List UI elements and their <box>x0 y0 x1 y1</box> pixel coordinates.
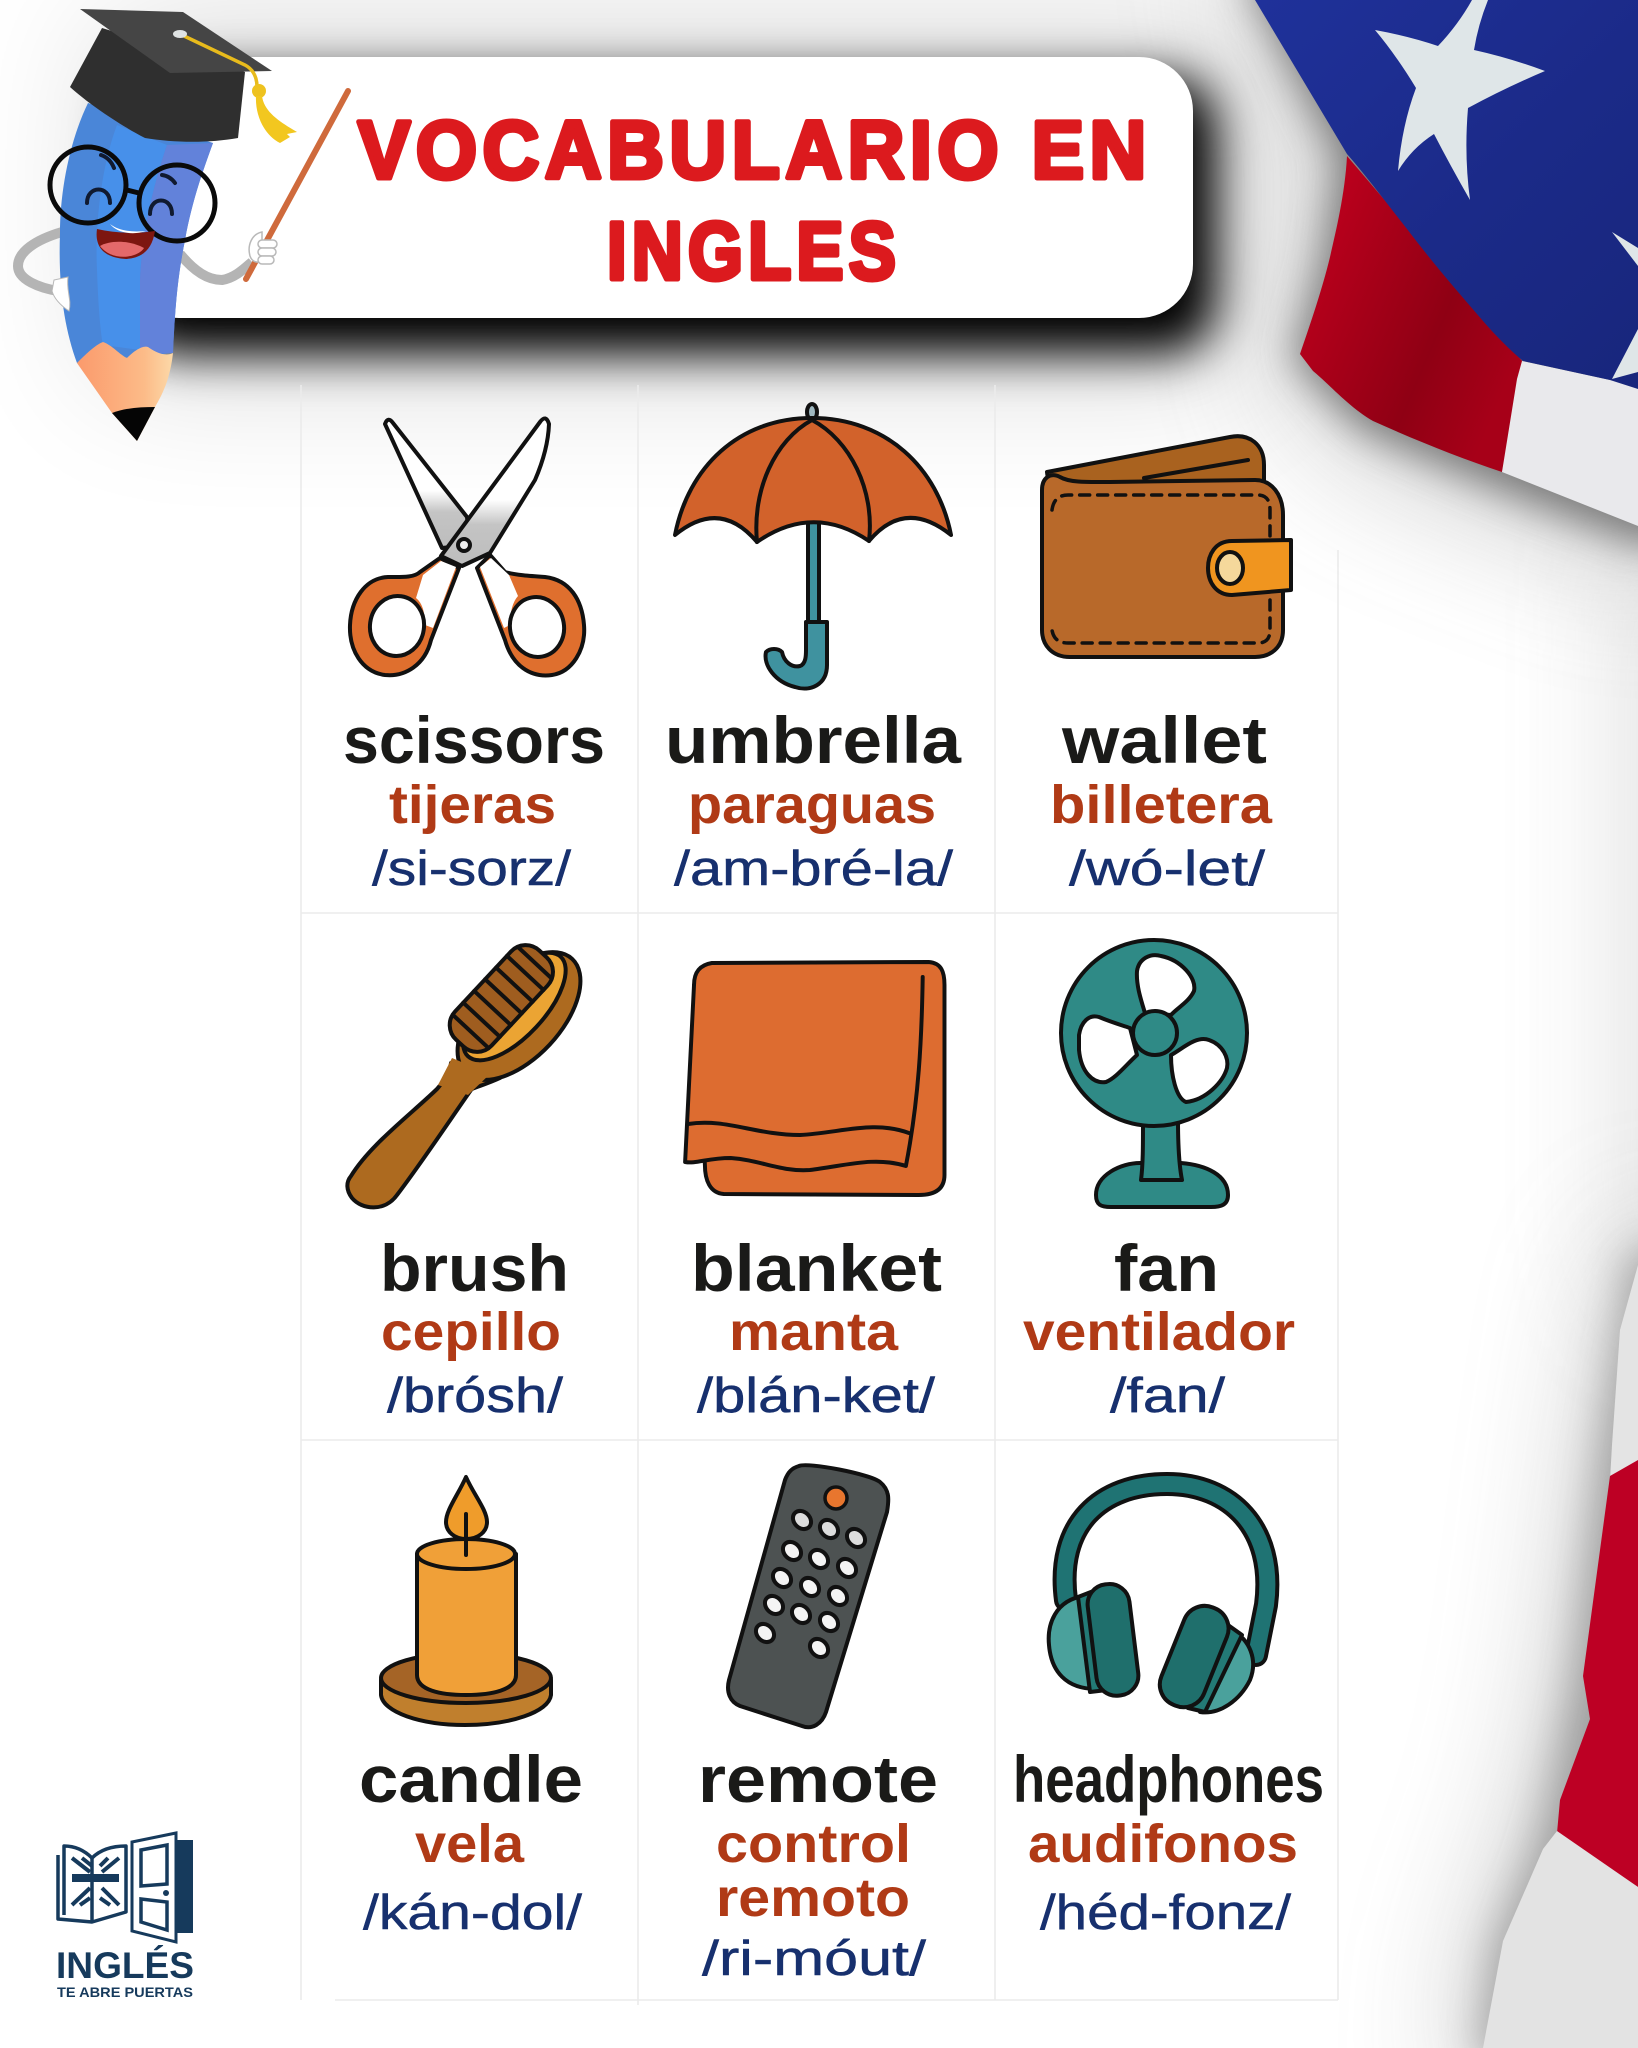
glasses <box>50 147 215 241</box>
flag red stripe <box>1300 156 1523 472</box>
right glove <box>249 232 277 264</box>
body centre strip <box>97 125 167 350</box>
translation: billetera <box>1050 775 1273 835</box>
graduation cap base <box>70 28 245 142</box>
icon: umbrella <box>675 404 951 689</box>
icon: scissors <box>350 418 584 675</box>
word: umbrella <box>665 703 962 777</box>
word: candle <box>359 1742 583 1816</box>
banner shadow <box>125 76 1217 354</box>
right arm <box>180 254 252 280</box>
translation <box>716 1814 911 1928</box>
icon: candle <box>381 1477 551 1725</box>
flag: top right corner <box>1255 0 1638 526</box>
translation: tijeras <box>389 775 556 835</box>
pronunciation: /blán-ket/ <box>697 1369 935 1423</box>
title: INGLES <box>607 206 901 297</box>
translation: remoto <box>716 1868 910 1928</box>
pronunciation: /fan/ <box>1110 1369 1225 1423</box>
word: wallet <box>1061 703 1267 777</box>
pronunciation: /wó-let/ <box>1069 842 1265 896</box>
icon: blanket <box>685 962 944 1195</box>
mouth <box>97 224 155 259</box>
card: remote <box>698 1465 938 1986</box>
word: scissors <box>343 703 605 777</box>
flag star large <box>1375 0 1545 200</box>
cap tassel <box>173 30 297 143</box>
pencil lead <box>112 407 155 441</box>
pointer stick <box>246 91 348 279</box>
flag: bottom right corner <box>1483 1265 1638 2048</box>
pencil wood tip <box>77 342 173 441</box>
pronunciation: /am-bré-la/ <box>674 842 953 896</box>
word: brush <box>380 1231 569 1305</box>
card: candle <box>359 1477 583 1940</box>
word: remote <box>698 1742 938 1816</box>
banner <box>125 57 1193 318</box>
icon: fan <box>1061 940 1247 1207</box>
pronunciation: /brósh/ <box>387 1369 563 1423</box>
left arm <box>18 232 62 291</box>
icon: brush <box>347 930 603 1207</box>
icon: open book with flag <box>58 1846 126 1922</box>
card: fan <box>1023 940 1295 1423</box>
translation: vela <box>415 1814 525 1874</box>
flag star partial <box>1612 232 1638 266</box>
translation: control <box>716 1814 911 1874</box>
graduation cap board <box>80 9 272 73</box>
eyes <box>87 155 175 214</box>
word: blanket <box>691 1231 942 1305</box>
translation: manta <box>729 1302 899 1362</box>
flag star partial lower <box>1612 329 1638 379</box>
flag white stripe <box>1502 361 1638 526</box>
translation: paraguas <box>688 775 936 835</box>
logo: ingles te abre puertas <box>56 1833 194 2000</box>
icon: open door <box>132 1833 193 1942</box>
translation: ventilador <box>1023 1302 1295 1362</box>
flag blue canton <box>1255 0 1638 389</box>
card: blanket <box>685 962 944 1423</box>
translation: cepillo <box>381 1302 561 1362</box>
card: wallet <box>1042 436 1291 896</box>
flag white upper <box>1610 1265 1638 1480</box>
card: umbrella <box>665 404 962 896</box>
icon: headphones <box>1049 1484 1267 1714</box>
table grid lines <box>301 385 1338 2005</box>
flag white lower <box>1483 1831 1638 2048</box>
card: headphones <box>1013 1484 1324 1940</box>
pronunciation: /ri-móut/ <box>702 1932 926 1986</box>
left glove <box>52 277 70 311</box>
card: brush <box>347 930 603 1423</box>
title: VOCABULARIO EN <box>358 105 1152 196</box>
translation: audifonos <box>1028 1814 1298 1874</box>
logo wordmark: INGLÉS <box>56 1945 194 1986</box>
card: scissors <box>343 418 605 896</box>
pencil mascot <box>18 9 348 441</box>
pronunciation: /kán-dol/ <box>363 1886 582 1940</box>
word: fan <box>1114 1231 1219 1305</box>
title <box>358 105 1152 297</box>
logo tagline: TE ABRE PUERTAS <box>57 1984 193 2000</box>
word: headphones <box>1013 1742 1324 1816</box>
icon: wallet <box>1042 436 1291 657</box>
icon: remote control <box>728 1465 888 1727</box>
pronunciation: /si-sorz/ <box>372 842 571 896</box>
pronunciation: /héd-fonz/ <box>1040 1886 1291 1940</box>
pencil body <box>60 103 213 363</box>
body right strip <box>140 143 213 355</box>
flag red fold <box>1557 1460 1638 1887</box>
